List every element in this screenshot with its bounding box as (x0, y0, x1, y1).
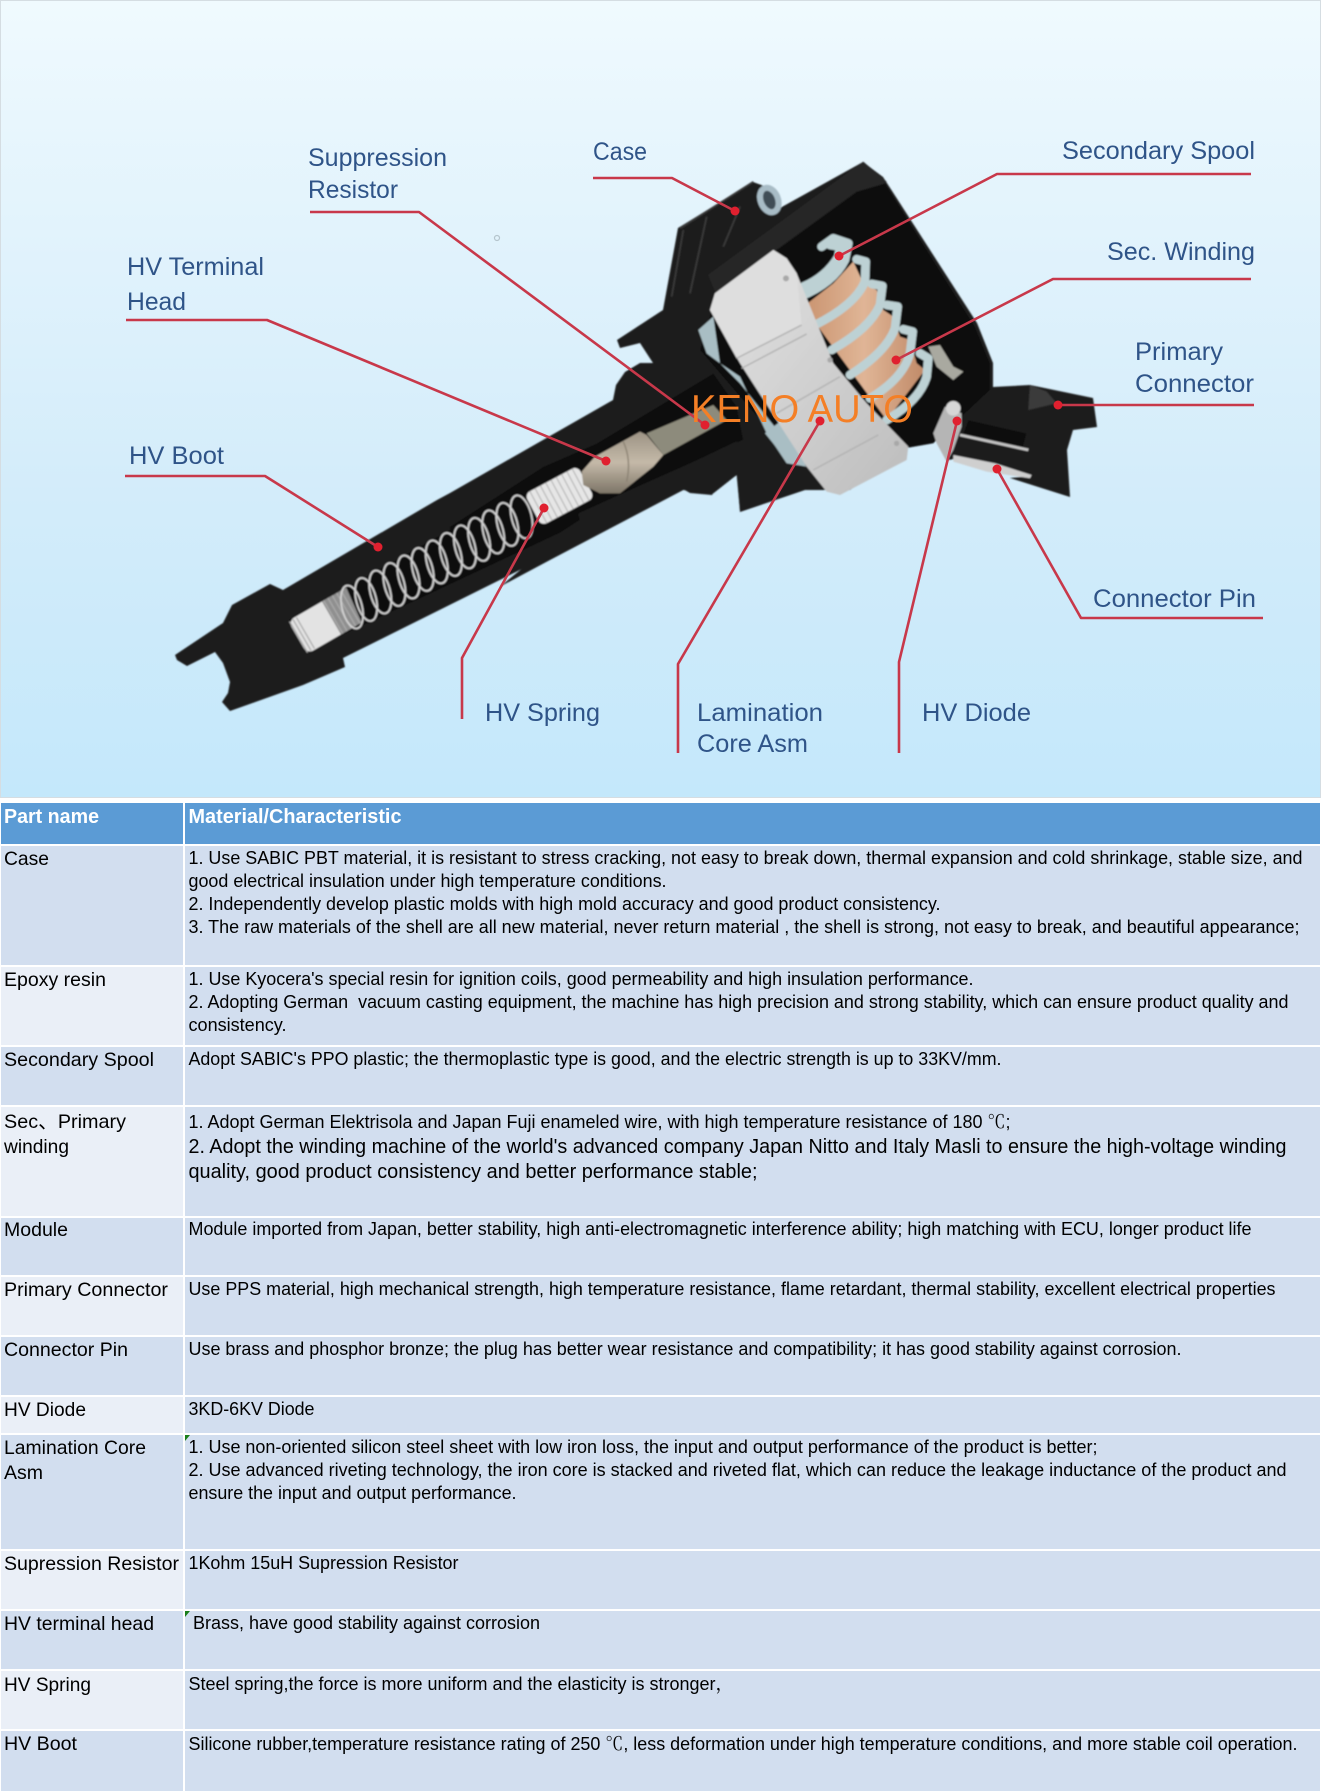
row: HV spring: HV Spring (4, 1674, 91, 1696)
boot inner cavity (450, 373, 743, 578)
row: epoxy resin: 2. Adopting German vacuum casting equipment, the machine has high precision and strong stability, which can ensure product quality and (188, 992, 1288, 1012)
row: HV terminal head: Brass, have good stability against corrosion (193, 1613, 540, 1633)
row: case: 3. The raw materials of the shell are all new material, never return material , the shell is strong, not easy to break, and beautiful appearance; (188, 917, 1300, 937)
row: lamination core asm: Asm (4, 1462, 43, 1484)
small ring mark (494, 236, 500, 240)
label: HV boot: HV Boot (129, 442, 224, 470)
leader: primary connector (1054, 400, 1254, 410)
row: connector pin: Use brass and phosphor bronze; the plug has better wear resistance and compatibility; it has good stability against corrosion. (188, 1339, 1182, 1359)
leader: case (593, 178, 740, 216)
secondary spool flanges (800, 238, 928, 420)
label: lamination core asm: Lamination (697, 699, 823, 727)
row: case: good electrical insulation under high temperature conditions. (188, 871, 666, 891)
diagram background (0, 0, 1320, 798)
row: primary connector: Primary Connector (4, 1279, 168, 1301)
label: primary connector (1135, 338, 1254, 398)
label: suppression resistor: Suppression (308, 144, 447, 172)
row: secondary and primary winding: 1. Adopt German Elektrisola and Japan Fuji enameled wire, with high temperature resistance of 180 ℃; (188, 1112, 1010, 1132)
label: case: Case (593, 138, 647, 166)
panel: coil diagram (0, 0, 1320, 798)
table: parts and materials (1, 803, 1320, 1791)
diode and connector hardware (928, 345, 1057, 478)
watermark: KENO AUTO (691, 388, 913, 431)
row: secondary and primary winding: Sec、Primary (4, 1111, 126, 1133)
row: secondary and primary winding: quality, good product consistency and better performance stable; (188, 1161, 758, 1183)
label: HV diode: HV Diode (922, 699, 1031, 727)
mounting bushing (757, 185, 782, 215)
row: lamination core asm: ensure the input and output performance. (188, 1483, 516, 1503)
boot channel (288, 468, 580, 647)
leader: HV spring (462, 504, 548, 719)
row: secondary spool (1, 1047, 1320, 1105)
leader: connector pin (992, 464, 1263, 618)
row: primary connector: Use PPS material, high mechanical strength, high temperature resistance, flame retardant, thermal stability, excellent electrical properties (188, 1279, 1276, 1299)
illustration: ignition coil cutaway (175, 162, 1097, 711)
label: lamination core asm: Core Asm (697, 730, 808, 758)
row: HV boot: HV Boot (4, 1733, 78, 1755)
housing upper band (708, 162, 887, 295)
row: HV boot (1, 1731, 1320, 1791)
secondary winding copper (803, 262, 925, 420)
row: HV diode: 3KD-6KV Diode (188, 1399, 314, 1419)
label: secondary spool: Secondary Spool (1062, 137, 1255, 165)
row: supression resistor: 1Kohm 15uH Supression Resistor (188, 1553, 458, 1573)
leader: HV diode (899, 416, 962, 753)
row: HV spring: Steel spring,the force is more uniform and the elasticity is stronger， (188, 1674, 734, 1694)
label: HV spring: HV Spring (485, 699, 600, 727)
row: case: Case (4, 848, 49, 870)
row: HV terminal head (1, 1611, 1320, 1669)
label: primary connector: Primary (1135, 338, 1224, 366)
row: case: 1. Use SABIC PBT material, it is resistant to stress cracking, not easy to break down, thermal expansion and cold shrinkage, stable size, and (188, 848, 1302, 868)
table header row: Part name (4, 806, 99, 828)
row: HV diode (1, 1397, 1320, 1433)
row: module: Module imported from Japan, better stability, high anti-electromagnetic interference ability; high matching with ECU, longer product life (188, 1219, 1252, 1239)
high voltage spring (328, 489, 546, 635)
label: suppression resistor (308, 144, 447, 204)
row: epoxy resin: Epoxy resin (4, 969, 106, 991)
row: module: Module (4, 1219, 68, 1241)
ribbed spring cap (525, 466, 594, 526)
row: secondary and primary winding (1, 1107, 1320, 1216)
coil housing silhouette (175, 162, 1097, 711)
row: secondary spool: Secondary Spool (4, 1049, 154, 1071)
rubber tip (288, 588, 365, 654)
label: HV terminal head (127, 253, 264, 316)
row: epoxy resin (1, 967, 1320, 1045)
row: secondary and primary winding: winding (3, 1136, 69, 1158)
row: case: 2. Independently develop plastic molds with high mold accuracy and good product consistency. (188, 894, 940, 914)
row: lamination core asm: Lamination Core (4, 1437, 146, 1459)
row: supression resistor (1, 1551, 1320, 1609)
label: lamination core asm (697, 699, 823, 758)
label: connector pin: Connector Pin (1093, 585, 1256, 613)
row: lamination core asm: 1. Use non-oriented silicon steel sheet with low iron loss, the input and output performance of the product is better; (188, 1437, 1098, 1457)
label: suppression resistor: Resistor (308, 176, 398, 204)
row: lamination core asm: 2. Use advanced riveting technology, the iron core is stacked and riveted flat, which can reduce the leakage inductance of the product and (188, 1460, 1286, 1480)
row: secondary spool: Adopt SABIC's PPO plastic; the thermoplastic type is good, and the electric strength is up to 33KV/mm. (188, 1049, 1002, 1069)
row: module (1, 1218, 1320, 1275)
label: primary connector: Connector (1135, 370, 1254, 398)
leader: secondary winding (892, 279, 1251, 364)
table header row (1, 803, 1320, 844)
leader: HV boot (125, 476, 382, 552)
row: HV boot: Silicone rubber,temperature resistance rating of 250 ℃, less deformation under high temperature conditions, and more stable coil operation. (188, 1734, 1298, 1754)
row: secondary and primary winding: 2. Adopt the winding machine of the world's advanced company Japan Nitto and Italy Masli to ensure the high-voltage winding (188, 1136, 1286, 1158)
row: HV terminal head: HV terminal head (4, 1613, 154, 1635)
leader: secondary spool (834, 174, 1251, 260)
mounting bracket ribs (672, 182, 753, 297)
leader: suppression resistor (310, 212, 710, 430)
lamination core (710, 250, 908, 495)
row: HV spring (1, 1671, 1320, 1729)
housing recess (700, 183, 990, 467)
terminal head (582, 405, 727, 493)
label: HV terminal head: Head (127, 288, 186, 316)
row: connector pin: Connector Pin (4, 1339, 128, 1361)
row: lamination core asm (1, 1435, 1320, 1549)
row: HV diode: HV Diode (4, 1399, 86, 1421)
label: secondary winding: Sec. Winding (1107, 238, 1255, 266)
row: epoxy resin: consistency. (188, 1015, 286, 1035)
row: primary connector (1, 1277, 1320, 1335)
row: connector pin (1, 1337, 1320, 1395)
leader: lamination core (678, 416, 824, 753)
label: HV terminal head: HV Terminal (127, 253, 264, 281)
leader: HV terminal head (126, 320, 610, 466)
row: case (1, 846, 1320, 965)
table header row: Material/Characteristic (188, 806, 402, 828)
spool behind core (698, 317, 813, 467)
row: supression resistor: Supression Resistor (4, 1553, 179, 1575)
lower housing wall (500, 442, 770, 587)
row: epoxy resin: 1. Use Kyocera's special resin for ignition coils, good permeability and high insulation performance. (188, 969, 974, 989)
